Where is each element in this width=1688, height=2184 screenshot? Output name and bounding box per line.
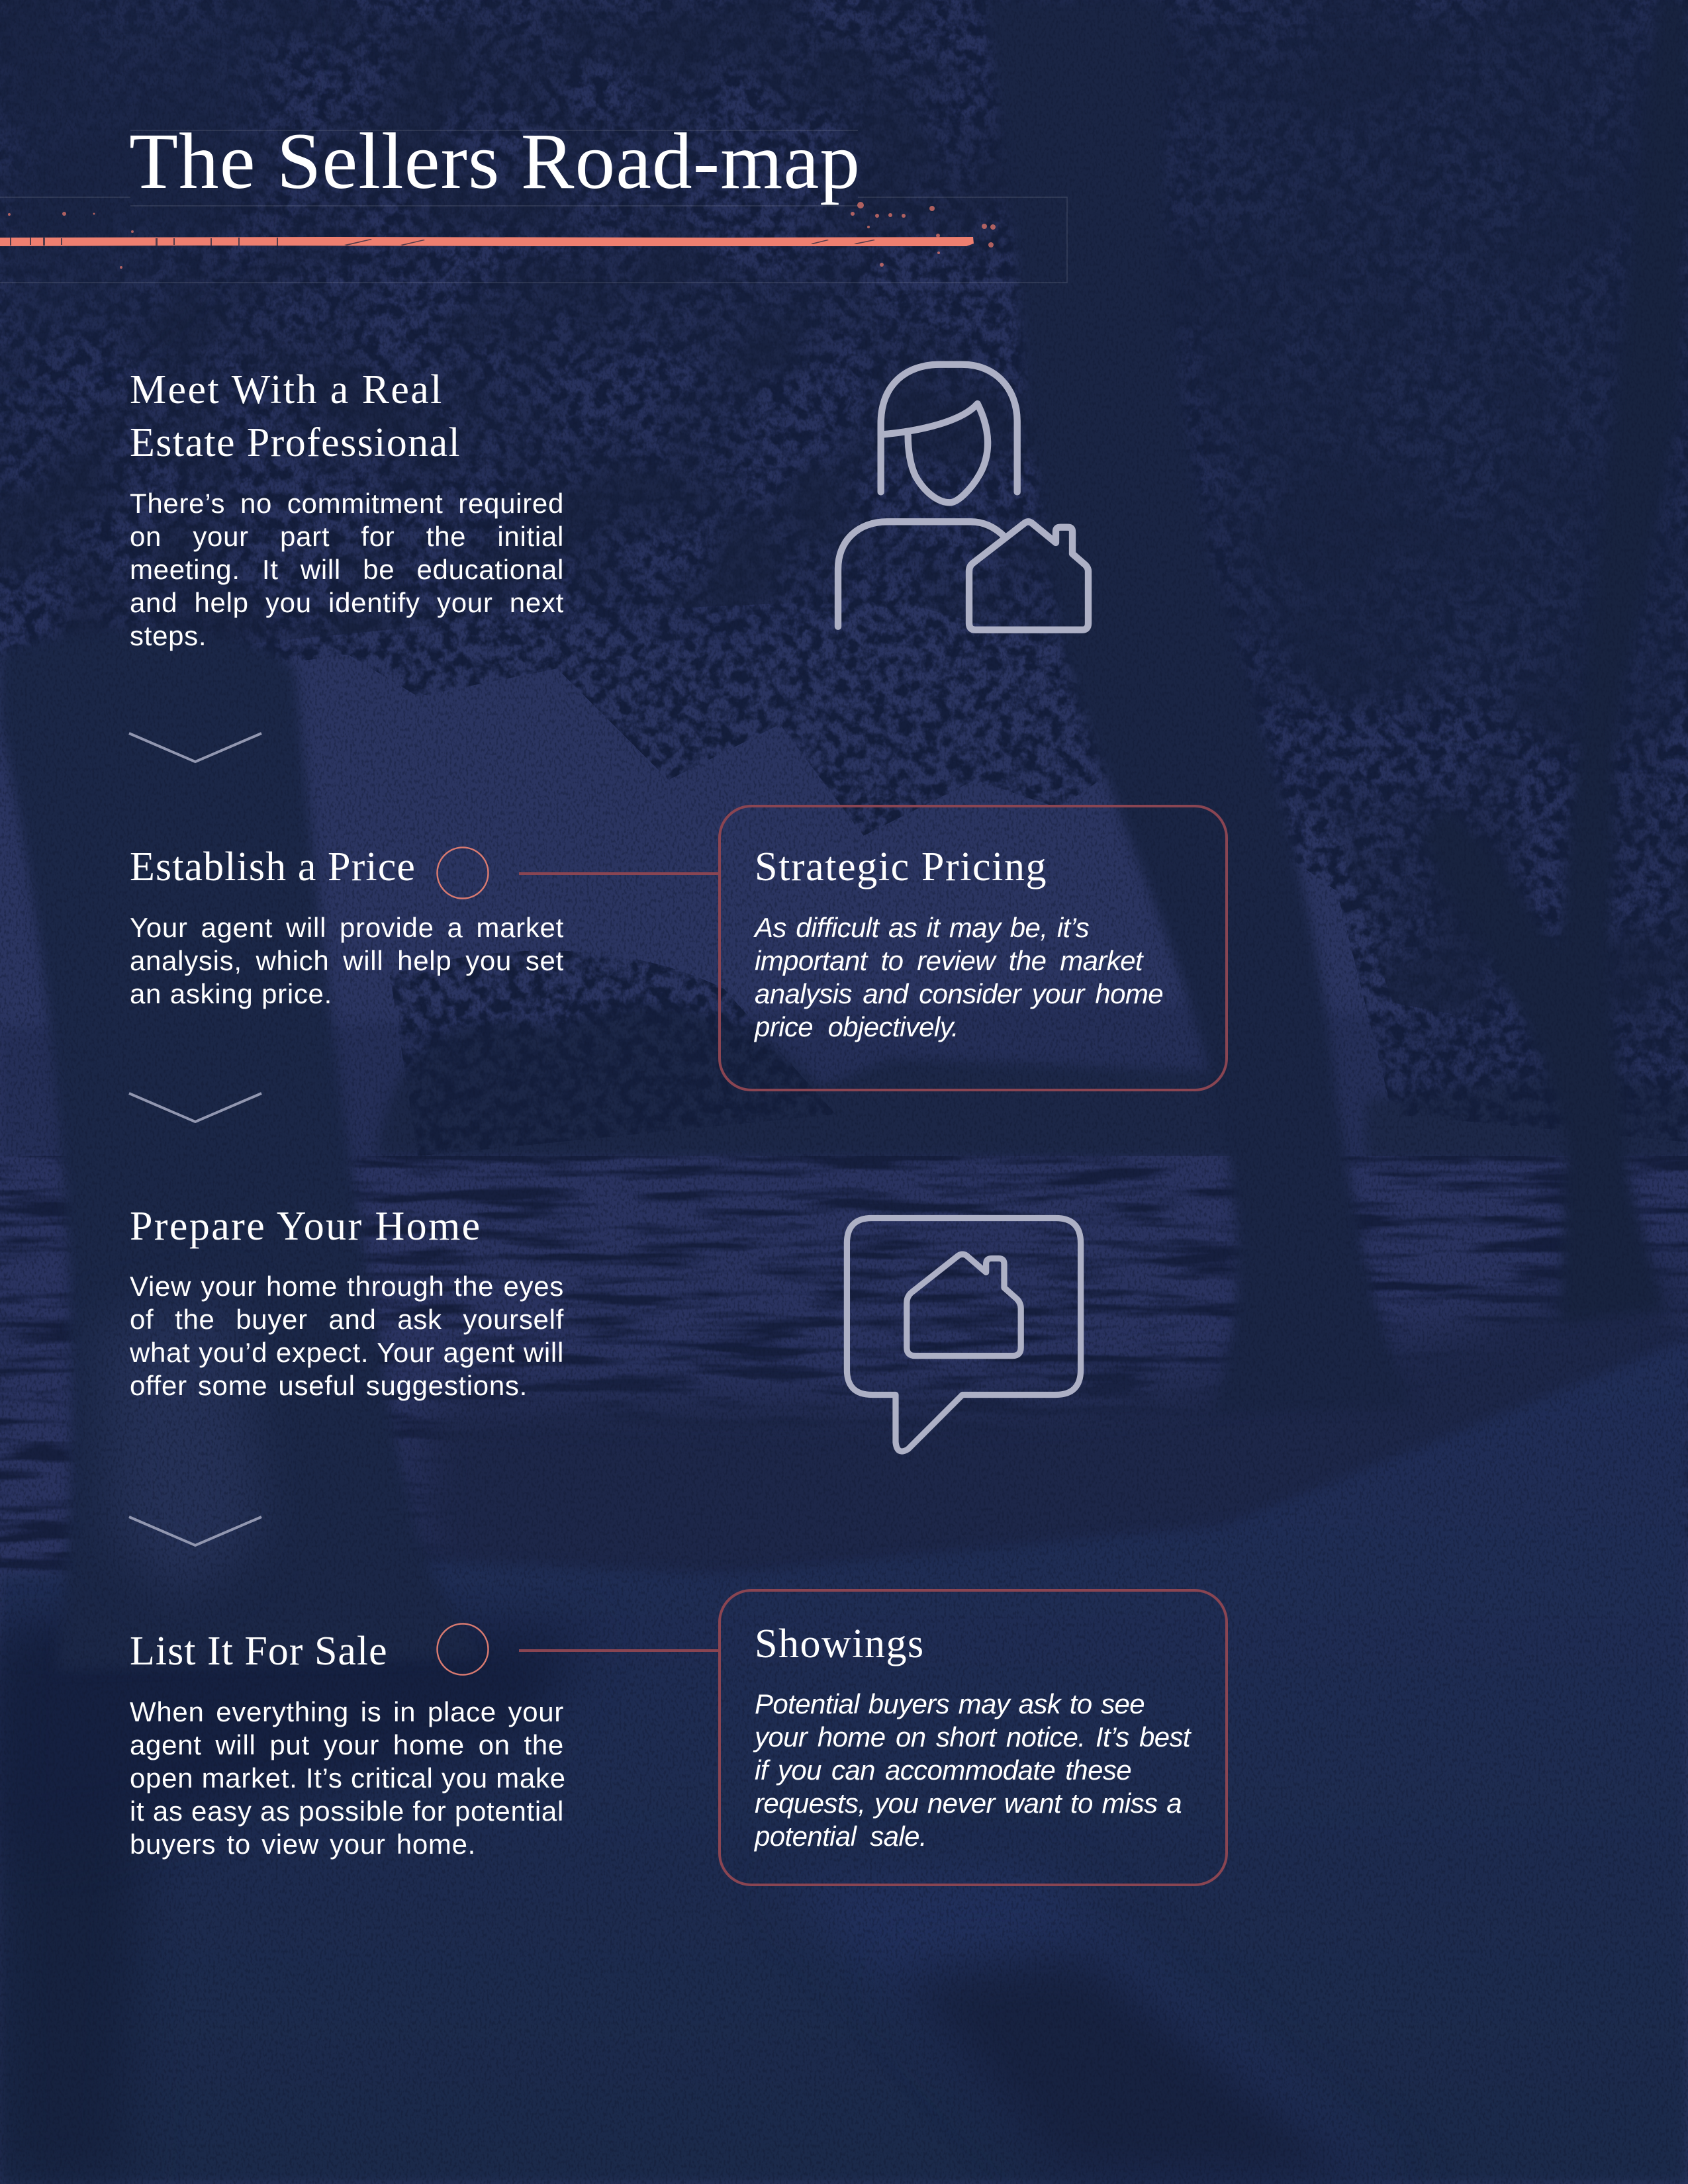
step 4 body: open market. It’s critical you make	[130, 1762, 566, 1794]
callout body: analysis and consider your home	[755, 978, 1163, 1009]
step 3 body: View your home through the eyes	[130, 1271, 564, 1302]
red title rule with splatter	[0, 202, 996, 269]
step 4 body: buyers to view your home.	[130, 1829, 476, 1860]
callout heading: Strategic Pricing	[755, 844, 1047, 889]
step 3 body: what you’d expect. Your agent will	[130, 1337, 564, 1368]
step 1 heading	[130, 367, 461, 465]
callout body: important to review the market	[755, 945, 1143, 976]
canopy base shadow	[0, 0, 1688, 1058]
step 1 body: on your part for the initial	[130, 521, 564, 552]
left trunk	[0, 629, 481, 1672]
step 4 body: it as easy as possible for potential	[130, 1796, 564, 1827]
step 3 body: offer some useful suggestions.	[130, 1370, 528, 1401]
canopy dark masses	[0, 0, 1688, 1058]
callout: showings	[718, 1589, 1228, 1886]
step 2 body: an asking price.	[130, 978, 332, 1009]
horizon treeline	[0, 1003, 1688, 1163]
step 2 body: Your agent will provide a market	[130, 912, 564, 943]
callout body: price objectively.	[755, 1011, 959, 1042]
step 2 body	[130, 911, 564, 1011]
arrow: chevron 1	[128, 731, 263, 765]
step 1 body: There’s no commitment required	[130, 488, 564, 519]
ground and road	[0, 1340, 1688, 2184]
callout body: potential sale.	[755, 1821, 927, 1852]
callout body	[755, 911, 1165, 1044]
arrow: chevron 2	[128, 1091, 263, 1125]
step 1 body: and help you identify your next	[130, 587, 564, 618]
icon: agent with house	[834, 361, 1092, 633]
callout body: if you can accommodate these	[755, 1754, 1131, 1786]
arrow: chevron 3	[128, 1514, 263, 1549]
dark top corners	[0, 0, 293, 348]
canopy mottled leaves	[0, 0, 1688, 1156]
step 4 heading: List It For Sale	[130, 1629, 388, 1674]
marker circle 1	[434, 844, 491, 901]
title: The Sellers Road-map	[129, 117, 861, 206]
callout body: your home on short notice. It’s best	[755, 1721, 1190, 1752]
centre-right trunk	[983, 0, 1414, 1414]
step 4 body: When everything is in place your	[130, 1696, 564, 1727]
far-right trunk	[1421, 0, 1688, 1323]
step 3: prepare your home	[130, 1204, 567, 1409]
callout body: requests, you never want to miss a	[755, 1788, 1182, 1819]
connector 1	[519, 871, 719, 876]
step 2 heading: Establish a Price	[130, 844, 416, 889]
callout: strategic pricing	[718, 805, 1228, 1091]
step 4 body	[130, 1696, 564, 1861]
step 4 body: agent will put your home on the	[130, 1729, 564, 1760]
step 3 body: of the buyer and ask yourself	[130, 1304, 564, 1335]
icon: speech bubble with house	[841, 1211, 1086, 1456]
step 2 body: analysis, which will help you set	[130, 945, 564, 976]
connector 2	[519, 1648, 719, 1653]
step 3 heading: Prepare Your Home	[130, 1204, 482, 1249]
step 2: establish a price	[130, 846, 567, 1012]
title guide lines	[0, 130, 1068, 283]
step 4: list it for sale	[130, 1629, 567, 1864]
callout body	[755, 1688, 1192, 1853]
marker circle 2	[434, 1621, 491, 1678]
callout body: As difficult as it may be, it’s	[755, 912, 1089, 943]
step 1 heading: Meet With a Real	[130, 367, 444, 412]
step 1 body: steps.	[130, 620, 207, 651]
step 3 body	[130, 1270, 564, 1402]
step 1 body: meeting. It will be educational	[130, 554, 564, 585]
step 1 body	[130, 488, 564, 651]
step 1: meet with a real estate professional	[130, 367, 564, 651]
callout heading: Showings	[755, 1621, 925, 1666]
field	[0, 1156, 1688, 1574]
step 1 heading: Estate Professional	[130, 420, 461, 465]
callout body: Potential buyers may ask to see	[755, 1688, 1145, 1719]
